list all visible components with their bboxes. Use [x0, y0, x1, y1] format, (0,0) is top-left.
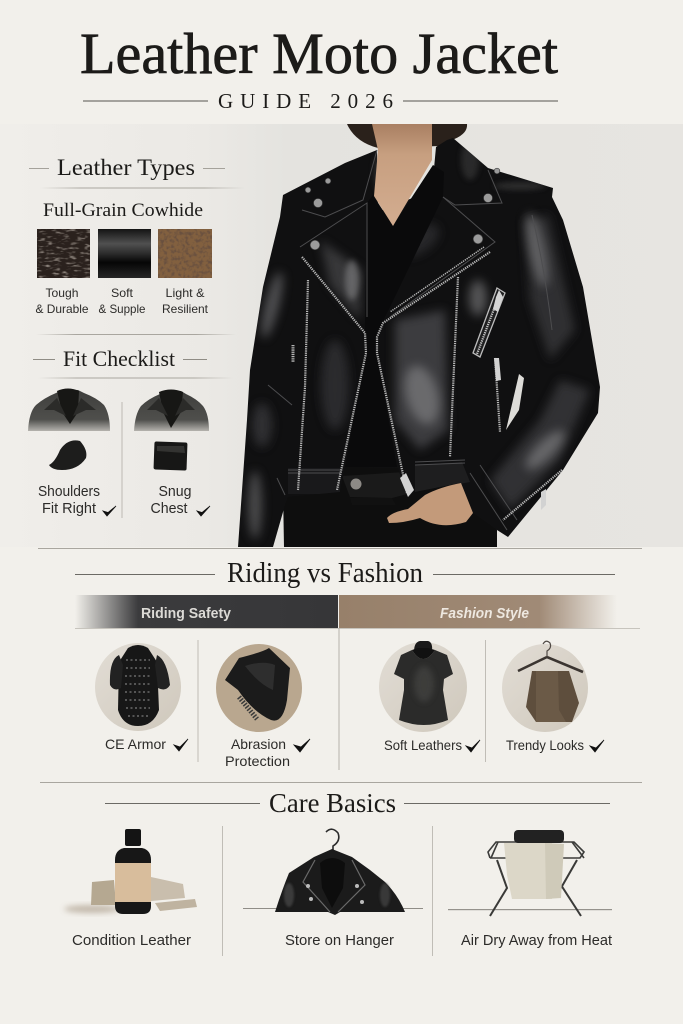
- black tee: [345, 165, 444, 467]
- heading: care basics: Care Basics: [269, 788, 396, 818]
- label: shoulders fit right: Shoulders: [38, 484, 100, 500]
- label: CE armor: CE Armor: [105, 736, 166, 752]
- label: abrasion protection: Protection: [225, 753, 290, 769]
- jeans: [283, 465, 497, 547]
- neck and chest skin: [372, 124, 432, 226]
- subheading: full-grain cowhide: Full-Grain Cowhide: [43, 200, 203, 221]
- label: store on hanger: Store on Hanger: [285, 932, 394, 949]
- icon: jacket shoulders: [28, 388, 110, 431]
- swatch label: light and resilient: Light &: [166, 286, 204, 300]
- hand in pocket: [387, 483, 473, 525]
- icon: jacket on hanger: [243, 829, 423, 915]
- label: snug chest: [150, 484, 210, 517]
- metal snaps: [305, 168, 500, 250]
- title: Leather Moto Jacket: [80, 21, 558, 86]
- hair: [347, 124, 467, 148]
- swatch: tough and durable: [37, 229, 90, 278]
- swatch label: tough and durable: & Durable: [36, 302, 89, 316]
- waistband and button: [342, 472, 415, 505]
- label: abrasion protection: Abrasion: [231, 736, 286, 752]
- icon: soft leather top: [379, 641, 467, 732]
- heading: fit checklist: Fit Checklist: [63, 346, 175, 371]
- icon: leather chest panel: [154, 441, 187, 471]
- swatch label: light and resilient: Resilient: [162, 302, 209, 316]
- swatch label: soft and supple: Soft: [111, 286, 134, 300]
- panel: riding vs fashion: [75, 558, 640, 770]
- heading: leather types: Leather Types: [57, 155, 195, 180]
- icon: jacket chest: [134, 390, 209, 431]
- label: abrasion protection: [225, 736, 310, 769]
- icon: drying rack with towel: [448, 830, 612, 916]
- label: shoulders fit right: Fit Right: [42, 501, 96, 517]
- panel: fit checklist: [28, 346, 233, 518]
- banner: fashion style: [339, 595, 617, 628]
- label: shoulders fit right: [38, 484, 116, 517]
- label: snug chest: Snug: [158, 484, 192, 500]
- icon: abrasion protection leather: [216, 644, 302, 732]
- silver zippers: [293, 247, 562, 520]
- panel: care basics: [64, 788, 613, 956]
- zipper pulls: [400, 358, 546, 510]
- icon: hanger with trendy look: [502, 641, 588, 732]
- swatch: soft and supple: [98, 229, 151, 278]
- heading: riding vs fashion: Riding vs Fashion: [227, 558, 423, 589]
- banner: riding safety: Riding Safety: [141, 606, 231, 622]
- banner: fashion style: Fashion Style: [440, 606, 529, 622]
- swatch: light and resilient: [158, 229, 212, 278]
- label: snug chest: Chest: [150, 501, 188, 517]
- label: air dry away from heat: Air Dry Away from Heat: [461, 932, 613, 949]
- panel: leather types: [29, 155, 245, 316]
- icon: shoulder pad: [49, 440, 86, 470]
- swatch label: tough and durable: Tough: [46, 286, 78, 300]
- label: soft leathers: Soft Leathers: [384, 737, 462, 753]
- subtitle: guide 2026: GUIDE 2026: [218, 89, 393, 113]
- swatch label: tough and durable: [36, 286, 89, 316]
- hero photo: woman wearing black leather moto jacket: [238, 124, 600, 547]
- icon: CE armor back protector: [95, 643, 181, 731]
- elbow gap showing background: [506, 374, 524, 430]
- swatch label: soft and supple: & Supple: [98, 302, 146, 316]
- jacket silhouette: [238, 138, 600, 547]
- banner: riding safety: [75, 595, 338, 628]
- lapels and collar edges: [268, 150, 552, 530]
- icon: leather conditioner bottle: [64, 829, 197, 914]
- hero photo panel background: [0, 124, 683, 547]
- swatch label: light and resilient: [162, 286, 209, 316]
- label: condition leather: Condition Leather: [72, 932, 191, 949]
- chest pocket zipper: [473, 288, 505, 357]
- label: trendy looks: Trendy Looks: [506, 737, 584, 753]
- leather sheen highlights: [248, 140, 590, 539]
- swatch label: soft and supple: [98, 286, 146, 316]
